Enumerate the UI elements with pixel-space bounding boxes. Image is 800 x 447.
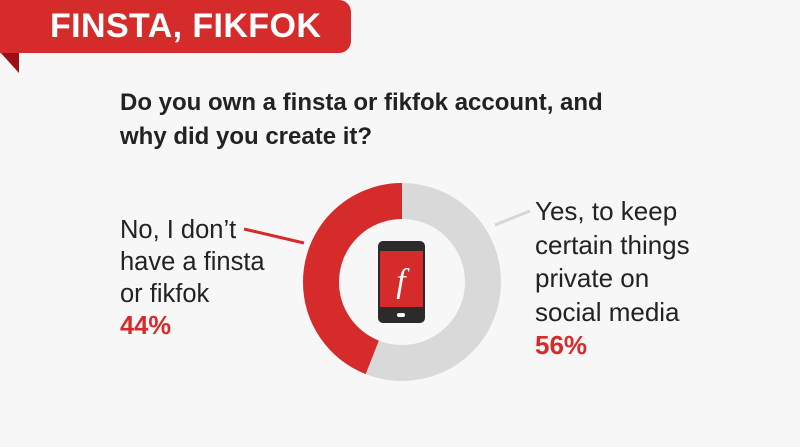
icon: phone bbox=[378, 241, 425, 323]
label: yes: private on bbox=[535, 263, 649, 293]
question heading: Do you own a finsta or fikfok account, and why did you create it? bbox=[120, 89, 603, 150]
banner title bbox=[0, 0, 351, 53]
icon: phone: f bbox=[396, 263, 410, 300]
label: no: or fikfok bbox=[120, 280, 209, 308]
label: no: No, I don’t bbox=[120, 216, 236, 244]
label: yes: social media bbox=[535, 296, 680, 326]
label: no: 44% bbox=[120, 312, 171, 340]
donut segments bbox=[321, 201, 483, 363]
label: yes: certain things bbox=[535, 230, 690, 260]
label: yes: 56% bbox=[535, 330, 587, 360]
label: no: have a finsta bbox=[120, 248, 265, 276]
label: yes bbox=[535, 196, 690, 360]
banner title: FINSTA, FIKFOK bbox=[50, 7, 321, 45]
banner fold bbox=[0, 52, 19, 73]
leader line: yes bbox=[495, 211, 530, 225]
label: no bbox=[120, 216, 265, 340]
banner bbox=[0, 0, 351, 73]
leader line: no bbox=[244, 229, 304, 243]
label: yes: Yes, to keep bbox=[535, 196, 677, 226]
